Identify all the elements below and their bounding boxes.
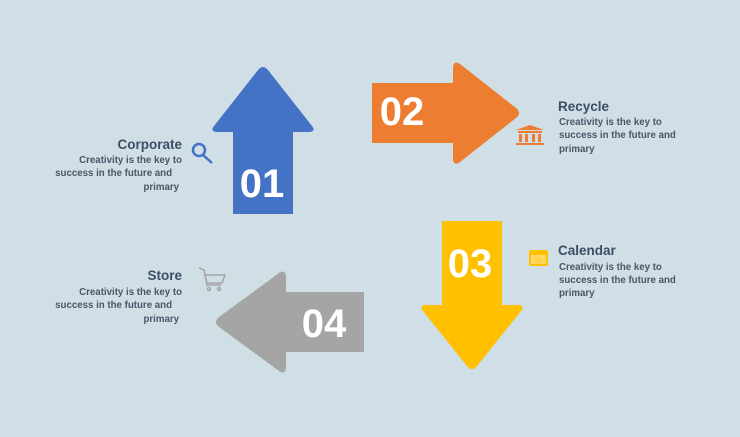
arrow 03 (421, 221, 523, 369)
arrow 02 (372, 63, 519, 164)
text: Corporate (55, 137, 182, 193)
text: Corporate: Corporate (117, 137, 182, 152)
icon: cart (199, 268, 225, 290)
text: Corporate: Creativity is the key to (79, 155, 182, 166)
text: Corporate: success in the future and (55, 168, 172, 179)
text: Recycle (558, 99, 676, 155)
text: Recycle: Creativity is the key to (559, 117, 662, 128)
text: Recycle: Recycle (558, 99, 610, 114)
arrow 04: 04 (302, 302, 347, 346)
text: Calendar (558, 243, 676, 299)
text: Calendar: Creativity is the key to (559, 262, 662, 273)
text: Recycle: success in the future and (559, 130, 676, 141)
icon: magnifier (193, 144, 212, 163)
text: Calendar: Calendar (558, 243, 617, 258)
text: Store: Creativity is the key to (79, 287, 182, 298)
arrow 01: 01 (240, 162, 284, 206)
text: Store: Store (147, 268, 182, 283)
arrow 04 (216, 272, 364, 372)
text: Calendar: success in the future and (559, 275, 676, 286)
text: Calendar: primary (559, 288, 595, 299)
icon: calendar (529, 250, 548, 266)
arrow 02: 02 (380, 90, 424, 134)
icon: calendar: 25 (535, 259, 542, 265)
text: Store: primary (143, 314, 180, 325)
text: Store: success in the future and (55, 300, 172, 311)
text: Recycle: primary (559, 144, 595, 155)
text: Corporate: primary (143, 182, 180, 193)
icon: building (516, 125, 544, 145)
arrow 03: 03 (448, 242, 492, 286)
arrow 01 (212, 67, 314, 214)
text: Store (55, 268, 182, 325)
